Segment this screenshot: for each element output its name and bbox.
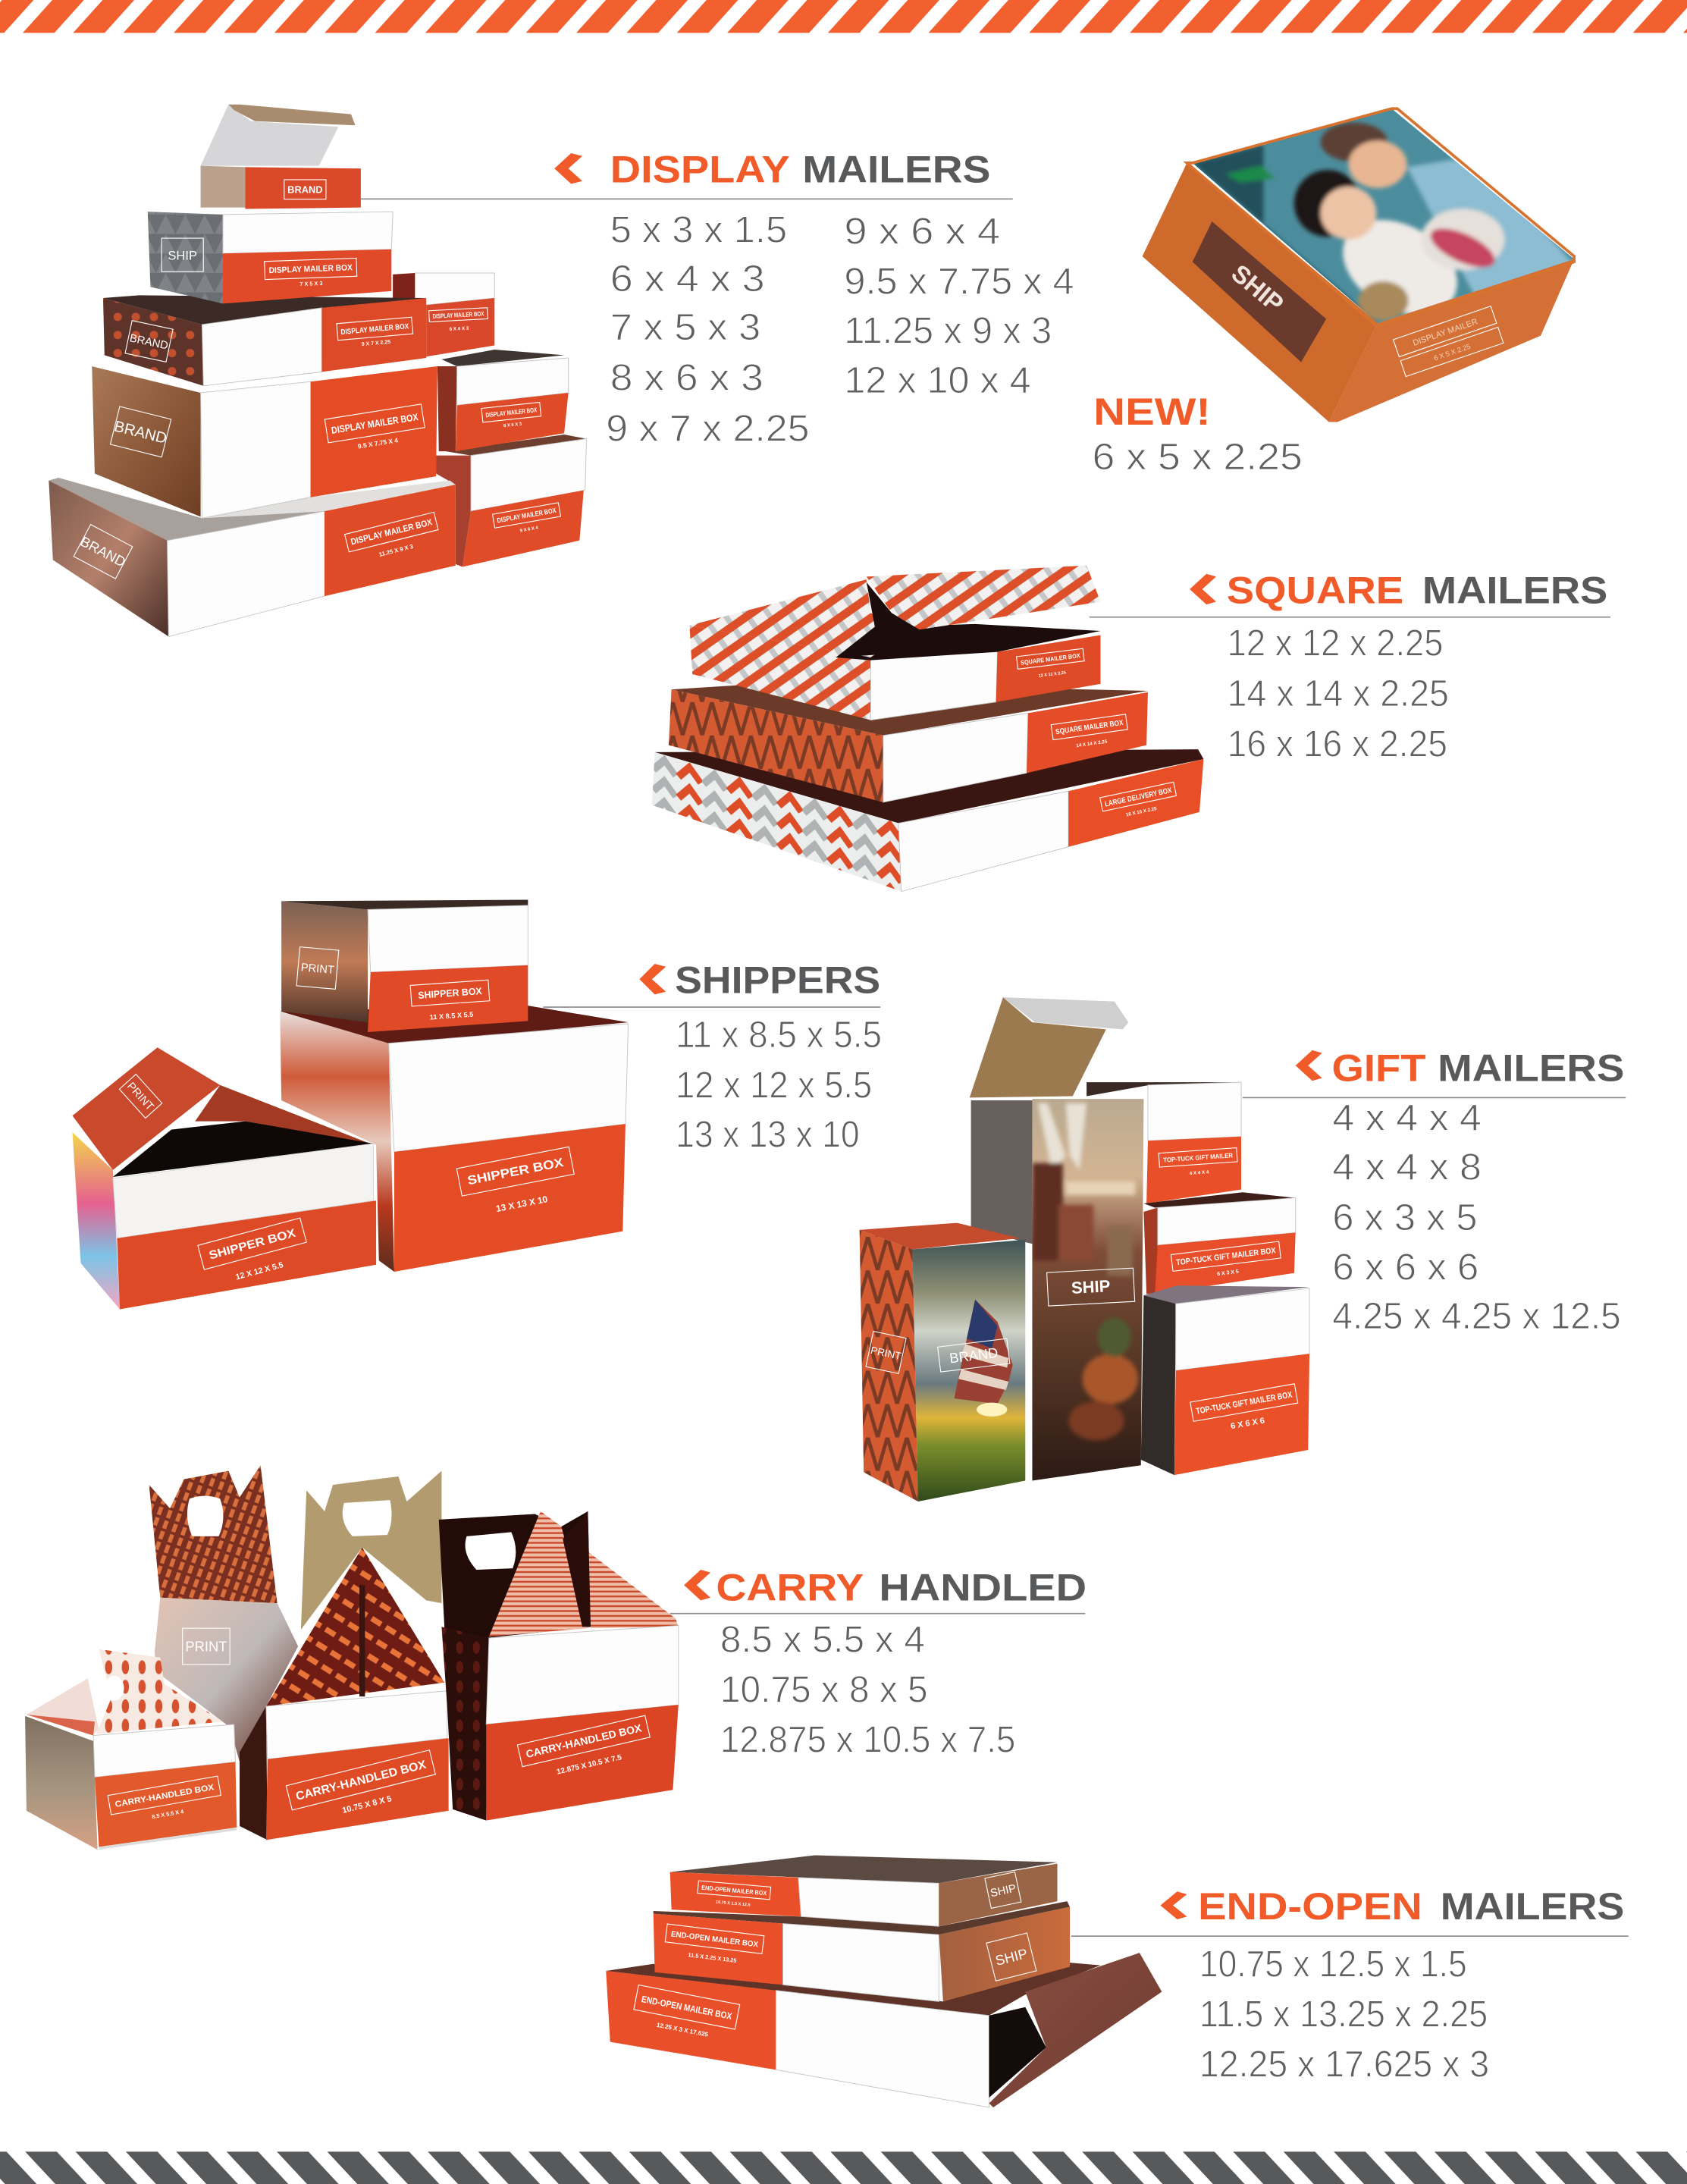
heading: carry handled xyxy=(670,1565,1087,1614)
box: tall handle with print photo: PRINT xyxy=(185,1638,227,1654)
box: 11.5 x 13.25 x 2.25 xyxy=(654,1901,1070,2001)
box: 12.875 x 10.5 x 7.5: CARRY-HANDLED BOX xyxy=(525,1721,643,1760)
box: 7 x 5 x 3 xyxy=(148,212,393,303)
sizes: display mailers left column: 8 x 6 x 3 xyxy=(610,356,764,398)
box: 8.5 x 5.5 x 4: 8.5 X 5.5 X 4 xyxy=(152,1808,185,1820)
box: 6 x 6 x 6: 6 X 6 X 6 xyxy=(1230,1417,1265,1431)
heading: end-open mailers: MAILERS xyxy=(1441,1884,1624,1928)
box: 9 x 7 x 2.25: 9 X 7 X 2.25 xyxy=(362,340,390,347)
sizes: display mailers right column: 11.25 x 9 x 3 xyxy=(844,309,1052,352)
photo: gift mailer boxes xyxy=(860,997,1309,1502)
sizes: display mailers left column xyxy=(606,209,809,449)
box: 11 x 8.5 x 5.5: PRINT xyxy=(300,962,334,977)
sizes: carry handled xyxy=(720,1618,1015,1761)
heading: shippers xyxy=(544,959,880,1008)
box: 5 x 3 x 1.5 open xyxy=(201,105,361,209)
box: 16 x 16 x 2.25 xyxy=(652,749,1203,892)
box: 14 x 14 x 2.25 xyxy=(669,682,1148,802)
sizes: display mailers right column: 9 x 6 x 4 xyxy=(844,209,1000,252)
box: 11 x 8.5 x 5.5: 11 X 8.5 X 5.5 xyxy=(429,1011,474,1021)
box: tall handle with print photo xyxy=(149,1465,298,1762)
box: 12 x 12 x 2.25 open lid: 12 X 12 X 2.25 xyxy=(1038,670,1066,679)
box: 10.75 x 8 x 5: CARRY-HANDLED BOX xyxy=(294,1759,428,1803)
sizes: display mailers left column: 7 x 5 x 3 xyxy=(610,306,760,348)
sizes: square mailers xyxy=(1228,621,1449,764)
callout: new size: NEW! xyxy=(1093,390,1211,433)
ship label panel xyxy=(1193,221,1326,362)
box: 13 x 13 x 10 xyxy=(280,1006,629,1272)
heading: gift mailers: GIFT xyxy=(1331,1046,1426,1089)
sizes: end-open mailers xyxy=(1199,1942,1489,2085)
box: 4.25 x 4.25 x 12.5 tall open: SHIP xyxy=(1071,1276,1111,1298)
photo: carry handled boxes xyxy=(25,1465,679,1850)
box: 9.5 x 7.75 x 4 wood: 9.5 X 7.75 X 4 xyxy=(357,436,399,450)
sizes: end-open mailers: 11.5 x 13.25 x 2.25 xyxy=(1199,1992,1488,2035)
heading: gift mailers xyxy=(1243,1046,1626,1098)
box: 12 x 12 x 5.5 open: PRINT xyxy=(124,1081,155,1113)
box: 11.25 x 9 x 3 xyxy=(49,478,456,636)
box: 9 x 6 x 4: 9 X 6 X 4 xyxy=(519,526,539,534)
heading: display mailers xyxy=(361,148,1013,199)
box: 10.75 x 12.5 x 1.5: END-OPEN MAILER BOX xyxy=(701,1884,767,1897)
box: 4 x 4 x 8 flag: BRAND xyxy=(949,1345,999,1366)
box: 11 x 8.5 x 5.5 xyxy=(281,900,528,1032)
heading: end-open mailers xyxy=(1071,1884,1629,1937)
box: 10.75 x 12.5 x 1.5 xyxy=(670,1856,1058,1926)
box: 6 x 4 x 4 rear: DISPLAY MAILER BOX xyxy=(432,309,484,320)
heading: shippers: SHIPPERS xyxy=(675,959,880,1002)
sizes: shippers: 13 x 13 x 10 xyxy=(676,1113,860,1156)
box: 13 x 13 x 10: 13 X 13 X 10 xyxy=(495,1194,549,1214)
sizes: shippers: 11 x 8.5 x 5.5 xyxy=(676,1013,882,1056)
box: 6 x 4 x 4 rear: 6 X 4 X 3 xyxy=(449,326,469,332)
box: 8 x 6 x 3: DISPLAY MAILER BOX xyxy=(485,406,538,419)
box: 11.5 x 13.25 x 2.25: SHIP xyxy=(994,1945,1029,1969)
sizes: gift mailers: 4 x 4 x 8 xyxy=(1332,1146,1482,1188)
box: 4 x 4 x 4: TOP-TUCK GIFT MAILER xyxy=(1163,1151,1233,1164)
sizes: display mailers left column: 9 x 7 x 2.25 xyxy=(606,406,809,449)
box: 12 x 12 x 2.25 open lid: SQUARE MAILER BOX xyxy=(1021,652,1081,667)
box: 11.25 x 9 x 3: BRAND xyxy=(78,533,128,570)
sizes: square mailers: 16 x 16 x 2.25 xyxy=(1228,722,1447,764)
top stripe band xyxy=(0,0,1687,33)
box: 11.5 x 13.25 x 2.25: END-OPEN MAILER BOX xyxy=(670,1930,759,1949)
photo: new 6 x 5 x 2.25 mailer xyxy=(1143,108,1574,422)
box: 9 x 6 x 4 xyxy=(436,435,587,567)
box: 16 x 16 x 2.25: LARGE DELIVERY BOX xyxy=(1104,786,1173,808)
sizes: display mailers left column: 5 x 3 x 1.5 xyxy=(610,209,787,251)
sizes: display mailers right column: 12 x 10 x 4 xyxy=(844,359,1031,401)
heading: square mailers: MAILERS xyxy=(1422,568,1607,611)
heading: display mailers: DISPLAY xyxy=(610,148,790,191)
photograph on lid xyxy=(1193,123,1574,334)
box: 8 x 6 x 3: 8 X 6 X 3 xyxy=(503,422,522,428)
box: 6 x 3 x 5: 6 X 3 X 5 xyxy=(1217,1269,1239,1277)
box: 8.5 x 5.5 x 4: CARRY-HANDLED BOX xyxy=(114,1783,215,1809)
front label outlines xyxy=(1394,306,1504,377)
box: 14 x 14 x 2.25: 14 X 14 X 2.25 xyxy=(1076,739,1108,748)
sizes: gift mailers: 4 x 4 x 4 xyxy=(1332,1096,1482,1138)
sizes: square mailers: 14 x 14 x 2.25 xyxy=(1228,672,1449,714)
sizes: gift mailers: 6 x 6 x 6 xyxy=(1332,1245,1478,1288)
heading: gift mailers: MAILERS xyxy=(1438,1046,1624,1089)
box: 9 x 7 x 2.25: DISPLAY MAILER BOX xyxy=(340,322,409,337)
box: 9 x 7 x 2.25: BRAND xyxy=(128,332,169,353)
photo: display mailer stack xyxy=(49,105,587,636)
sizes: carry handled: 10.75 x 8 x 5 xyxy=(720,1668,928,1710)
photo: end-open mailers xyxy=(606,1856,1162,2107)
box: 6 x 4 x 4 rear xyxy=(393,273,494,356)
photo: shipper boxes xyxy=(73,900,629,1310)
box: 12.25 x 17.625 x 3: 12.25 X 3 X 17.625 xyxy=(656,2022,709,2038)
box: 12.875 x 10.5 x 7.5 xyxy=(439,1511,679,1821)
sizes: gift mailers: 6 x 3 x 5 xyxy=(1332,1196,1477,1238)
box: 8.5 x 5.5 x 4 xyxy=(25,1649,237,1850)
box: 12 x 12 x 5.5 open: 12 X 12 X 5.5 xyxy=(235,1260,284,1282)
box: 10.75 x 8 x 5: 10.75 X 8 X 5 xyxy=(341,1794,393,1815)
box: 4 x 4 x 4: 4 X 4 X 4 xyxy=(1189,1169,1209,1176)
box: 10.75 x 12.5 x 1.5: 10.75 X 1.5 X 12.5 xyxy=(716,1900,751,1908)
box: 12 x 12 x 5.5 open xyxy=(73,1047,376,1310)
sizes: carry handled: 8.5 x 5.5 x 4 xyxy=(720,1618,925,1660)
box: 12.25 x 17.625 x 3: END-OPEN MAILER BOX xyxy=(641,1994,733,2022)
box: 8 x 6 x 3 xyxy=(437,350,569,451)
bottom stripe band xyxy=(0,2151,1687,2184)
box: 11.25 x 9 x 3: 11.25 X 9 X 3 xyxy=(378,543,414,558)
sizes: gift mailers: 4.25 x 4.25 x 12.5 xyxy=(1332,1294,1621,1337)
box: 4.25 x 4.25 x 12.5 tall open xyxy=(970,997,1143,1480)
sizes: display mailers right column: 9.5 x 7.75 x 4 xyxy=(844,260,1074,303)
box: 12.25 x 17.625 x 3 xyxy=(606,1953,1162,2107)
sizes: gift mailers xyxy=(1332,1096,1621,1337)
box: 9.5 x 7.75 x 4 wood xyxy=(92,366,437,518)
box: 4 x 4 x 4 xyxy=(1087,1082,1241,1203)
box: 11.25 x 9 x 3: DISPLAY MAILER BOX xyxy=(350,517,434,547)
box: 7 x 5 x 3: SHIP xyxy=(168,249,197,263)
sizes: display mailers left column: 6 x 4 x 3 xyxy=(610,257,765,300)
box: 9.5 x 7.75 x 4 wood: DISPLAY MAILER BOX xyxy=(331,411,419,436)
sizes: shippers xyxy=(676,1013,882,1156)
box: 10.75 x 12.5 x 1.5: SHIP xyxy=(989,1882,1018,1900)
box: 12.875 x 10.5 x 7.5: 12.875 X 10.5 X 7.5 xyxy=(556,1753,623,1777)
box: 6 x 3 x 5 xyxy=(1143,1192,1296,1294)
sizes: carry handled: 12.875 x 10.5 x 7.5 xyxy=(720,1718,1015,1761)
box: 4 x 4 x 8 flag xyxy=(860,1223,1025,1502)
box: 11.5 x 13.25 x 2.25: 11.5 X 2.25 X 13.25 xyxy=(688,1951,737,1964)
sizes: shippers: 12 x 12 x 5.5 xyxy=(676,1063,872,1106)
box: 14 x 14 x 2.25: SQUARE MAILER BOX xyxy=(1055,719,1124,736)
sizes: end-open mailers: 12.25 x 17.625 x 3 xyxy=(1199,2043,1489,2085)
heading: carry handled: CARRY xyxy=(716,1565,864,1608)
sizes: display mailers right column xyxy=(844,209,1074,401)
box: 13 x 13 x 10: SHIPPER BOX xyxy=(466,1155,565,1188)
box: 9 x 6 x 4: DISPLAY MAILER BOX xyxy=(497,507,557,524)
box: 10.75 x 8 x 5 xyxy=(240,1471,449,1840)
heading: square mailers xyxy=(1090,568,1610,618)
callout: new size xyxy=(1092,390,1303,478)
sizes: square mailers: 12 x 12 x 2.25 xyxy=(1228,621,1443,664)
box: 5 x 3 x 1.5 open: BRAND xyxy=(287,184,323,195)
box: 6 x 6 x 6: TOP-TUCK GIFT MAILER BOX xyxy=(1196,1390,1293,1417)
box: 4 x 4 x 8 flag: PRINT xyxy=(870,1345,902,1362)
ship label panel: SHIP xyxy=(1226,259,1289,318)
box: 6 x 3 x 5: TOP-TUCK GIFT MAILER BOX xyxy=(1176,1246,1276,1267)
box: 9.5 x 7.75 x 4 wood: BRAND xyxy=(112,418,168,447)
heading: square mailers: SQUARE xyxy=(1227,568,1403,611)
box: 16 x 16 x 2.25: 16 X 16 X 2.25 xyxy=(1125,806,1158,817)
box: 9 x 7 x 2.25 xyxy=(103,295,426,386)
sizes: end-open mailers: 10.75 x 12.5 x 1.5 xyxy=(1199,1942,1467,1985)
box: 6 x 6 x 6 xyxy=(1141,1285,1309,1475)
heading: end-open mailers: END-OPEN xyxy=(1198,1884,1422,1928)
heading: display mailers: MAILERS xyxy=(802,148,990,191)
box: 11 x 8.5 x 5.5: SHIPPER BOX xyxy=(418,985,483,1001)
box: 12 x 12 x 2.25 open lid xyxy=(689,566,1100,720)
box: 7 x 5 x 3: 7 X 5 X 3 xyxy=(299,280,323,287)
front label outlines: DISPLAY MAILER xyxy=(1412,317,1479,348)
photo: square mailer stack xyxy=(652,566,1203,892)
callout: new size: 6 x 5 x 2.25 xyxy=(1092,435,1303,478)
front label outlines: 6 X 5 X 2.25 xyxy=(1433,343,1472,362)
heading: carry handled: HANDLED xyxy=(879,1565,1087,1608)
box: 12 x 12 x 5.5 open: SHIPPER BOX xyxy=(208,1227,298,1263)
box: 7 x 5 x 3: DISPLAY MAILER BOX xyxy=(268,263,353,275)
